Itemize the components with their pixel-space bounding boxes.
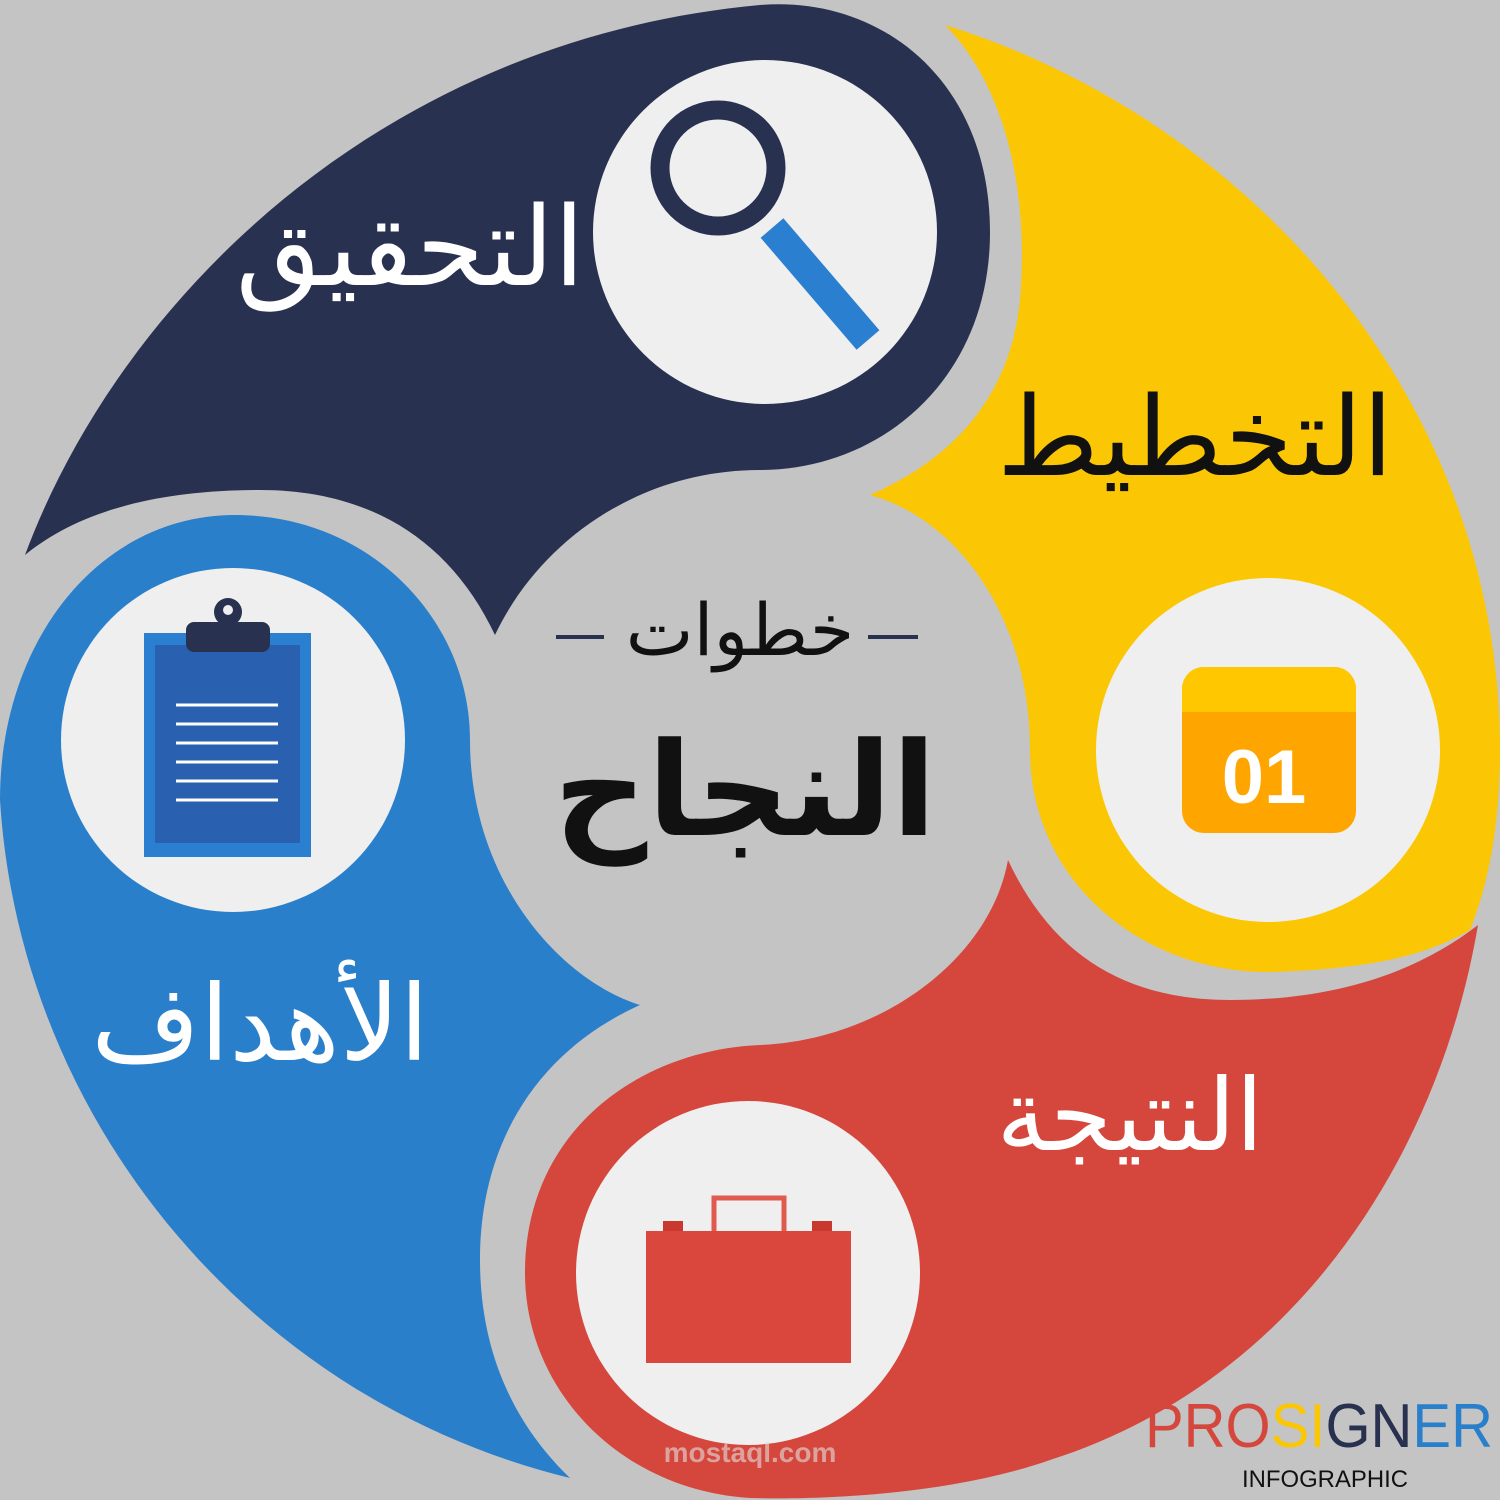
center title <box>554 588 936 867</box>
icon circle: briefcase <box>576 1101 920 1445</box>
label: التخطيط: التخطيط <box>997 373 1393 501</box>
label: النتيجة: النتيجة <box>997 1057 1263 1174</box>
label: التحقيق: التحقيق <box>236 183 584 312</box>
icon circle: calendar 01: 01 <box>1222 735 1306 820</box>
label: الأهداف: الأهداف <box>91 959 429 1085</box>
logo: PROSIGNER <box>1145 1392 1493 1493</box>
icon circle: calendar 01 <box>1096 578 1440 922</box>
center title: خطوات <box>626 588 854 673</box>
logo: PROSIGNER: PROSIGNER <box>1145 1392 1493 1461</box>
logo: PROSIGNER: INFOGRAPHIC <box>1242 1466 1408 1493</box>
panel: yellow petal planning <box>870 25 1500 972</box>
icon circle: magnifier <box>593 60 937 404</box>
panel: blue petal goals <box>0 515 640 1478</box>
panel: red petal result <box>525 860 1478 1498</box>
watermark: mostaql.com <box>664 1437 836 1468</box>
panel: navy petal investigation <box>25 4 990 635</box>
icon circle: clipboard <box>61 568 405 912</box>
center title: النجاح <box>554 714 936 867</box>
